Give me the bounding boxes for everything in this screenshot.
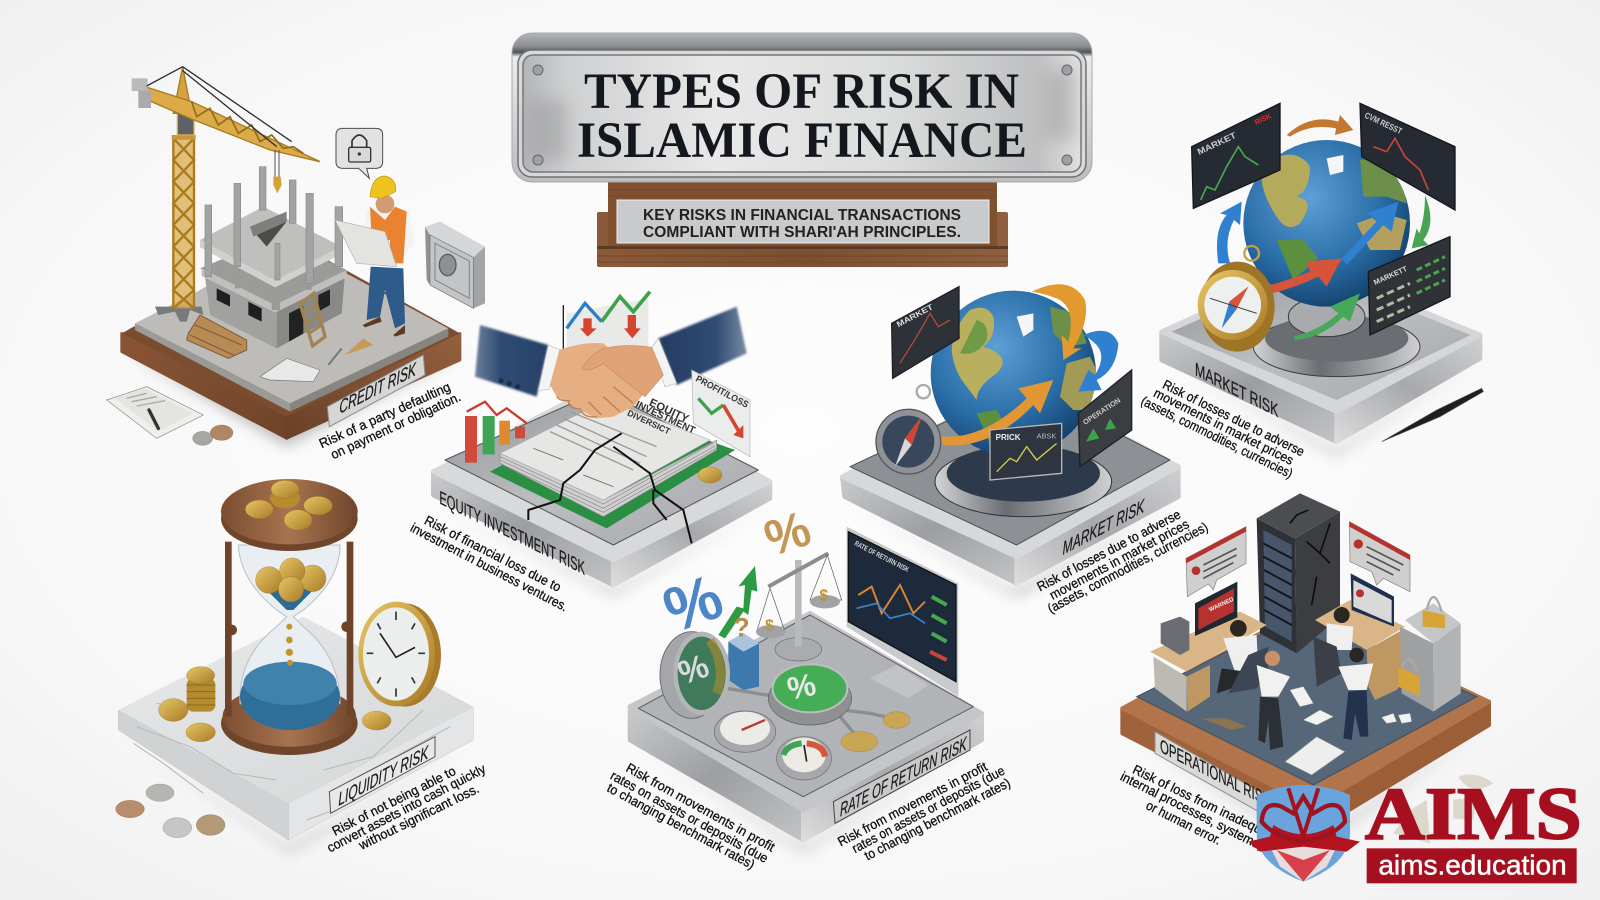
label: rate of return risk — [833, 730, 970, 823]
arrows — [1217, 115, 1430, 340]
left alert bubble — [1186, 527, 1246, 597]
logo wordmark: AIMS — [1365, 773, 1582, 855]
icon: balance scale: $ — [765, 618, 774, 635]
platform shadow — [123, 350, 470, 447]
label: credit risk — [327, 355, 425, 427]
icon: balance scale: $ — [819, 588, 828, 605]
label: liquidity risk: LIQUIDITY RISK — [338, 742, 429, 811]
left desk: WARNED — [1208, 597, 1236, 613]
filing cabinet — [1398, 597, 1461, 712]
gauges — [714, 711, 910, 780]
description: rate of return right: to changing benchmark rates) — [862, 775, 1013, 863]
subtitle plate: KEY RISKS IN FINANCIAL TRANSACTIONS — [643, 207, 961, 224]
seated worker — [1217, 620, 1268, 693]
panel screens: CVM RESST — [1363, 110, 1404, 136]
percent symbols: % — [655, 561, 732, 646]
panel: credit risk — [107, 67, 485, 462]
profit/loss card: PROFIT/LOSS — [694, 374, 750, 410]
description: liquidity risk: convert assets into cash quickly — [324, 761, 488, 855]
scattered papers — [1202, 687, 1412, 775]
panel screens — [1192, 103, 1455, 335]
description: liquidity risk: Risk of not being able to — [330, 763, 458, 839]
description: rate of return right: Risk from movements in profit — [835, 759, 990, 849]
hourglass — [221, 479, 358, 755]
description: rate of return left: Risk from movements in profit — [624, 760, 778, 855]
icon: clock — [358, 602, 441, 707]
panel: liquidity risk — [116, 479, 488, 855]
description: liquidity risk: without significant loss. — [355, 781, 481, 853]
label: equity investment risk: EQUITY INVESTMENT RISK — [439, 487, 585, 580]
question cube — [728, 613, 759, 690]
cracked contract — [490, 397, 735, 543]
label: credit risk: CREDIT RISK — [339, 359, 416, 419]
globe — [1243, 140, 1410, 307]
title plaque — [512, 33, 1092, 267]
description: market risk right: movements in market prices — [1151, 385, 1296, 468]
label: market risk: MARKET RISK — [1063, 495, 1145, 560]
title: ISLAMIC FINANCE — [577, 113, 1027, 169]
worker — [335, 176, 415, 337]
server rack — [1257, 493, 1340, 653]
coins — [116, 667, 391, 838]
label: liquidity risk — [329, 737, 435, 813]
percent disc green — [768, 664, 852, 725]
description: market risk: movements in market prices — [1047, 516, 1192, 603]
bar chart — [465, 402, 527, 463]
growth arrow — [718, 566, 757, 638]
logo background scrap — [1393, 774, 1493, 843]
panel: market risk centre — [842, 284, 1210, 616]
monitor — [847, 527, 958, 698]
standing workers — [1257, 648, 1373, 750]
title — [577, 64, 1027, 169]
globe — [931, 291, 1103, 456]
panel: rate of return risk — [605, 500, 1013, 872]
label: rate of return risk: RATE OF RETURN RISK — [840, 733, 968, 821]
icon: lock bubble — [336, 128, 383, 178]
description: operational risk: internal processes, systems, — [1118, 769, 1265, 853]
cracked contract: INVESTMENT — [634, 399, 697, 437]
percent disc green: % — [784, 666, 819, 707]
logo shield — [1248, 785, 1360, 882]
description: rate of return left: to changing benchmark rates) — [605, 780, 757, 872]
profit/loss card — [692, 370, 750, 457]
metal plate — [512, 33, 1092, 182]
subtitle plate — [617, 200, 989, 243]
panel screens: RISK — [1253, 111, 1273, 127]
metal platform — [1162, 265, 1480, 442]
globe stand — [935, 445, 1112, 517]
icon: balance scale — [756, 553, 842, 661]
panel screens: MARKET — [1196, 130, 1238, 157]
description: credit risk: Risk of a party defaulting — [317, 379, 453, 451]
left desk — [1150, 582, 1267, 712]
panel screens — [892, 287, 1132, 480]
description: operational risk: Risk of loss from inadequate — [1130, 762, 1280, 844]
metal platform — [630, 613, 982, 840]
compass — [876, 385, 941, 474]
leather platform — [1122, 612, 1489, 832]
icon: pen — [1382, 388, 1483, 442]
wood base — [122, 240, 460, 438]
panel screens: MARKETT — [1372, 264, 1409, 287]
cracked contract: DIVERSICT — [626, 408, 673, 437]
description: equity investment risk: investment in business ventures. — [408, 520, 570, 614]
description: rate of return left: rates on assets or deposits (due — [608, 768, 771, 866]
panel screens: MARKET — [895, 302, 935, 329]
title: TYPES OF RISK IN — [584, 64, 1019, 120]
platform shadow — [123, 737, 477, 853]
platform shadow — [847, 500, 1180, 598]
description: rate of return right: rates on assets or deposits (due — [849, 763, 1007, 856]
label: operational risk: OPERATIONAL RISK — [1160, 736, 1270, 812]
percent symbols — [655, 500, 817, 646]
question cube: ? — [733, 613, 750, 643]
description: market risk: Risk of losses due to adverse — [1034, 507, 1183, 594]
percent symbols: % — [758, 500, 817, 567]
logo url: aims.education — [1378, 849, 1567, 880]
platform shadow — [1167, 357, 1483, 457]
panel: equity investment risk — [408, 292, 773, 614]
panel screens: PRICK — [996, 433, 1021, 442]
description: operational risk: or human error. — [1144, 798, 1224, 848]
icon: safe — [425, 222, 485, 308]
description: market risk: (assets, commodities, currencies) — [1045, 519, 1210, 616]
second seated worker — [1313, 607, 1353, 687]
panel screens: OPERATION — [1081, 396, 1122, 427]
chart flag — [563, 292, 650, 353]
metal platform — [433, 385, 770, 585]
panel: market risk right — [1139, 103, 1483, 481]
handshake — [475, 307, 747, 418]
subtitle plate: COMPLIANT WITH SHARI'AH PRINCIPLES. — [643, 224, 961, 241]
metal platform — [842, 382, 1178, 583]
description: equity investment risk: Risk of financial loss due to — [422, 513, 564, 595]
monitor: RATE OF RETURN RISK — [853, 539, 911, 574]
globe stand — [1253, 297, 1420, 377]
description: market risk right: (assets, commodities, currencies) — [1139, 393, 1295, 481]
compass — [1198, 246, 1275, 352]
plaque wooden stand — [597, 176, 1008, 267]
percent disc big — [660, 632, 730, 718]
papers and coins — [107, 387, 233, 445]
platform shadow — [1127, 723, 1493, 850]
platform shadow — [633, 743, 983, 853]
percent disc big: % — [673, 648, 714, 693]
description: credit risk: on payment or obligation. — [328, 389, 463, 462]
platform shadow — [437, 503, 773, 597]
arrows — [940, 284, 1118, 445]
building — [187, 167, 373, 382]
label: operational risk — [1155, 732, 1270, 813]
cracked contract: EQUITY — [647, 397, 691, 426]
crane — [132, 67, 320, 322]
marble platform — [118, 617, 473, 840]
logo: AIMS — [1248, 773, 1582, 883]
connectors — [727, 688, 900, 740]
panel: operational risk — [1118, 493, 1582, 883]
right alert bubble — [1349, 522, 1410, 592]
label: market risk right: MARKET RISK — [1195, 359, 1278, 422]
right desk — [1315, 573, 1405, 700]
description: market risk right: Risk of losses due to adverse — [1160, 377, 1307, 459]
panel screens: ABSK — [1037, 431, 1056, 440]
